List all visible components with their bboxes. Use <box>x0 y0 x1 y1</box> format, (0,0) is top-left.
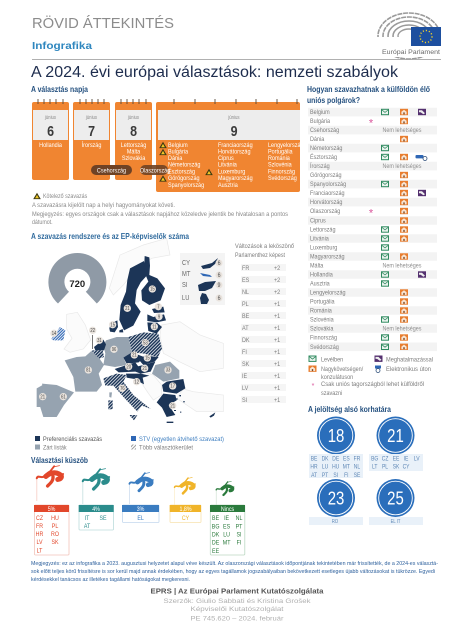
threshold: 3%: 3% <box>137 506 145 513</box>
panel: calendars <box>32 99 304 192</box>
text: election day note: dátumot. <box>32 220 53 226</box>
calendar: 9 June: Ciprus <box>218 156 234 162</box>
calendar: 9 June: Dánia <box>168 156 183 162</box>
legend: voting systems: STV (egyetlen átvihető szavazat) <box>139 436 224 443</box>
France <box>65 351 104 392</box>
threshold: none: IE <box>224 516 229 522</box>
table: seat changes: Változások a leköszönő <box>235 243 294 250</box>
panel: candidate age 18 <box>309 416 363 479</box>
calendar: 9 June: Bulgária <box>168 149 189 156</box>
panel: candidate age 21: 21 <box>387 426 404 446</box>
Corsica <box>109 392 112 398</box>
logo: European Parliament: Európai Parlament <box>382 49 440 56</box>
icon: yellow high jumper <box>175 477 195 505</box>
seat labels: 21 <box>170 403 175 408</box>
calendar: 8 June <box>115 99 152 180</box>
panel: candidate age 21: EE <box>393 456 400 463</box>
threshold: 4%: AT <box>84 524 91 530</box>
inset: small countries: CY <box>182 260 191 267</box>
seat labels: 15 <box>110 322 115 327</box>
Italy <box>103 374 151 412</box>
calendar: 6 June: június <box>44 115 57 121</box>
panel: candidate age 25: 25 <box>387 488 404 509</box>
Czechia <box>123 352 144 364</box>
panel: candidate age 18: AT <box>311 473 318 479</box>
seat labels: 61 <box>61 394 66 399</box>
footer: credits: Szerzők: Giulio Sabbati és Kristina Grošek <box>164 598 311 605</box>
chart: 720 seats hemicycle <box>48 253 106 304</box>
threshold: 4%: IT <box>85 516 90 522</box>
calendar: 9 June: Horvátország <box>218 149 250 156</box>
legend: voting abroad methods: Levélben <box>321 357 343 364</box>
threshold: 5%: HR <box>36 532 43 538</box>
table: voting abroad by country: Belgium <box>310 110 330 116</box>
table: voting abroad by country: Finnország <box>310 335 337 342</box>
panel: candidate age 21 <box>369 416 423 471</box>
table: voting abroad by country: Ausztria <box>310 281 330 288</box>
table: seat changes: Parlamenthez képest <box>235 252 285 259</box>
seat labels: 21 <box>132 352 137 358</box>
table: voting abroad by country: Luxemburg <box>310 245 337 252</box>
Sweden <box>119 261 147 330</box>
table: voting abroad by country: Szlovákia <box>310 326 334 333</box>
pill: Czechia: Csehország <box>97 168 126 175</box>
seat labels: 21 <box>142 366 147 371</box>
Romania <box>152 362 179 382</box>
table: seat changes: +2 <box>274 290 281 296</box>
table: seat changes: +1 <box>274 302 281 308</box>
table: voting abroad by country: Lengyelország <box>310 290 346 297</box>
panel: candidate age 21: BG <box>371 456 378 463</box>
heading: thresholds: Választási küszöb <box>31 456 88 465</box>
footer: credits: EPRS | Az Európai Parlament Kutatószolgálata <box>150 586 324 596</box>
table: voting abroad by country: Nem lehetséges <box>383 128 421 134</box>
threshold: none <box>210 481 245 555</box>
panel: candidate age 21: SK <box>393 464 400 471</box>
legend: voting abroad methods: Nagykövetségen/ <box>321 367 363 373</box>
table: seat changes: +2 <box>274 278 281 284</box>
Cyprus on map <box>209 412 215 418</box>
calendar: 9 June: Portugália <box>268 149 293 156</box>
threshold: none: SI <box>237 532 242 539</box>
seat labels: 11 <box>152 324 157 329</box>
calendar: 7 June <box>73 99 110 180</box>
calendar: 9 June: Svédország <box>268 176 297 182</box>
inset: small countries <box>180 253 225 305</box>
inset: small countries: MT <box>182 271 190 278</box>
table: seat changes: +1 <box>274 362 281 368</box>
calendar: 9 June: június <box>227 115 240 121</box>
threshold: 5%: 5% <box>48 506 56 513</box>
inset: small countries: 9 <box>218 283 220 289</box>
table: voting abroad by country: Málta <box>310 263 324 270</box>
calendar: 9 June: Franciaország <box>218 143 253 149</box>
Finland <box>141 256 165 305</box>
table: voting abroad by country <box>308 108 437 351</box>
Croatia and Slovenia <box>126 374 149 384</box>
text: election day note <box>32 202 288 226</box>
table: voting abroad by country: Olaszország <box>310 209 340 215</box>
heading: voting abroad <box>307 85 430 105</box>
calendar: 9 June: Szlovénia <box>268 162 292 169</box>
threshold: none: ES <box>223 524 230 531</box>
table: voting abroad by country: Nem lehetséges <box>383 263 421 270</box>
heading: voting system and MEPs: A szavazás rendszere és az EP-képviselők száma <box>31 232 189 241</box>
Latvia <box>147 314 166 322</box>
table: voting abroad by country: Ciprus <box>310 218 326 225</box>
Netherlands <box>94 340 106 350</box>
table: voting abroad by country: Szlovénia <box>310 317 334 324</box>
panel: candidate age 21: CY <box>403 464 410 471</box>
icon: red high jumper <box>37 466 63 501</box>
heading: voting abroad: Hogyan szavazhatnak a külföldön élő <box>307 85 430 94</box>
threshold: none: PT <box>236 524 243 531</box>
threshold: 3% <box>122 473 159 522</box>
panel: candidate age 18: FR <box>354 456 360 463</box>
Ireland <box>51 327 65 340</box>
inset: small countries: 6 <box>218 261 221 267</box>
panel: candidate age 21: LV <box>414 456 420 463</box>
seat labels: 14 <box>52 331 57 336</box>
panel: candidate age 18: MT <box>343 464 351 471</box>
table: seat changes: NL <box>242 290 250 296</box>
table: voting abroad by country: Spanyolország <box>310 182 346 188</box>
table: voting abroad by country: Hollandia <box>310 272 333 279</box>
seat labels: 9 <box>158 314 161 319</box>
calendar: 8 June: 8 <box>130 123 137 139</box>
calendar: 9 June: Észtország <box>168 168 195 176</box>
calendar: 7 June: június <box>85 115 98 121</box>
Germany <box>103 337 132 367</box>
seat labels: 21 <box>40 394 45 399</box>
calendar: 9 June: Ausztria <box>218 183 238 189</box>
seat labels: 17 <box>170 383 175 389</box>
table: voting abroad by country: Franciaország <box>310 191 345 197</box>
panel: candidate age 25 <box>369 479 423 525</box>
panel: candidate age 18: BE <box>311 456 318 463</box>
panel: candidate age 18: PT <box>322 473 329 479</box>
calendar: 9 June: Luxemburg <box>218 169 245 176</box>
calendar: 6 June: 6 <box>47 123 54 139</box>
threshold: 4% <box>79 469 114 530</box>
threshold: 5%: RO <box>51 532 59 538</box>
seat labels: 81 <box>86 367 91 373</box>
map: Europe voting systems <box>37 238 223 423</box>
heading: minimum candidate age: A jelöltség alsó korhatára <box>308 405 391 414</box>
pill: Czechia <box>91 165 132 175</box>
callout line for Belgium <box>91 335 94 349</box>
panel: candidate age 23: RO <box>332 519 339 524</box>
threshold: 4%: 4% <box>92 506 101 513</box>
calendar: 9 June: Finnország <box>268 169 295 176</box>
table: seat changes: +1 <box>274 338 281 344</box>
seat labels: 7 <box>157 304 160 309</box>
seat labels: 76 <box>120 386 125 391</box>
panel: candidate age 18: LU <box>322 464 328 471</box>
pill: Italy <box>140 165 170 175</box>
panel: candidate age 18: DK <box>322 456 329 463</box>
heading: election day: A választás napja <box>31 85 88 94</box>
legend: voting abroad methods: * <box>312 383 315 390</box>
note: kérdésekkel tanácsos az illetékes tagállami hatóságokat megkeresni. <box>31 577 190 583</box>
seat labels: 31 <box>97 338 102 343</box>
table: seat changes: +1 <box>274 386 281 392</box>
seat labels: 15 <box>145 355 150 361</box>
Greek islands <box>167 395 185 423</box>
seat labels: 20 <box>126 364 131 369</box>
panel: candidate age 18: HU <box>332 464 339 471</box>
panel: candidate age 25: EL IT <box>391 519 401 524</box>
chart: 720 seats hemicycle: 720 <box>69 279 85 290</box>
threshold: none: NL <box>236 516 243 522</box>
Greece <box>157 394 177 417</box>
legend: voting systems <box>35 436 224 452</box>
calendar: 7 June: 7 <box>88 123 95 139</box>
table: voting abroad by country: Portugália <box>310 299 335 306</box>
table: seat changes: LV <box>242 386 248 392</box>
table: seat changes: PL <box>242 302 249 308</box>
calendar: 9 June: Magyarország <box>218 176 253 182</box>
calendar: 6 June: Hollandia <box>39 143 63 149</box>
pill: Italy: Olaszország <box>140 168 170 175</box>
calendar: 8 June: Málta <box>127 149 141 156</box>
table: voting abroad by country: Románia <box>310 308 332 315</box>
table: voting abroad by country: Bulgária <box>310 119 331 125</box>
calendar: 9 June: Görögország <box>168 176 200 182</box>
table: seat changes: SK <box>242 362 249 368</box>
footer: credits: PE 745.620 – 2024. február <box>190 616 284 622</box>
seat labels: 12 <box>134 379 139 384</box>
threshold: none: LU <box>223 532 230 539</box>
legend: compulsory voting: Kötelező szavazás <box>43 194 87 200</box>
table: seat changes: IE <box>242 374 247 380</box>
table: seat changes: AT <box>242 326 249 332</box>
table: seat changes: +1 <box>274 398 281 404</box>
icon: blue high jumper <box>129 473 153 504</box>
legend: voting abroad methods: konzulátuson <box>321 375 353 381</box>
legend: voting abroad methods: szavazni <box>321 391 342 397</box>
calendar: 9 June: Lengyelország <box>268 143 304 149</box>
calendar: 9 June <box>156 99 304 192</box>
panel: candidate age 21: PL <box>382 464 388 471</box>
Belgium <box>91 350 104 359</box>
threshold: 5%: SK <box>51 540 59 546</box>
title: A 2024. évi európai választások: nemzeti szabályok <box>31 64 398 81</box>
calendar: 9 June: 9 <box>231 123 238 139</box>
legend: voting abroad methods: Csak uniós tagországból lehet külföldről <box>321 381 424 388</box>
threshold: none: FI <box>237 540 242 547</box>
table: seat changes: +2 <box>274 266 281 272</box>
Estonia <box>152 307 165 313</box>
legend: voting abroad methods <box>308 356 433 397</box>
Portugal <box>37 385 44 407</box>
threshold: 1.8%: 1,8% <box>180 506 192 513</box>
threshold: 5%: PL <box>52 524 59 530</box>
Sardinia <box>108 400 113 410</box>
table: seat changes: BE <box>242 314 249 320</box>
panel: candidate age 18: SE <box>354 473 361 479</box>
threshold: none: DK <box>212 532 219 539</box>
subheader: infographic: Infografika <box>32 40 92 52</box>
threshold: none: DE <box>212 540 219 547</box>
calendar: 9 June: Litvánia <box>218 162 237 169</box>
table: seat changes <box>235 243 294 404</box>
panel: candidate age 21: LT <box>372 464 378 471</box>
panel: candidate age 21: CZ <box>382 456 389 463</box>
inset: small countries: 6 <box>218 273 221 279</box>
inset: small countries: SI <box>182 282 188 289</box>
Sicily <box>129 415 137 420</box>
threshold: none: MT <box>223 540 231 547</box>
panel: candidate age 18: DE <box>332 456 339 463</box>
panel: candidate age 18: ES <box>343 456 350 463</box>
table: seat changes: +1 <box>274 326 281 332</box>
table: voting abroad by country: Írország <box>310 163 330 170</box>
footer: credits <box>150 586 324 622</box>
threshold: 5%: LV <box>36 540 43 546</box>
table: seat changes: ES <box>242 278 249 284</box>
legend: voting systems: Több választókerület <box>139 444 193 452</box>
seat labels: 21 <box>125 306 130 311</box>
footer: credits: Képviselői Kutatószolgálat <box>190 606 284 613</box>
seat labels: 53 <box>143 340 148 345</box>
legend: voting abroad methods: Meghatalmazással <box>386 356 433 364</box>
Lithuania <box>147 322 162 334</box>
calendar: 8 June: június <box>127 115 140 121</box>
icon: teal high jumper <box>83 469 109 504</box>
note: sok előtt teljes körű frissítésre is sor kerül majd annak érdekében, hogy az egyes tagállamok jogszabályaiban bekövetkezett esetleges újabb változásokat is tükrözze. Egyedi <box>31 569 435 575</box>
Hungary <box>135 362 155 374</box>
legend: voting systems: Zárt listák <box>43 445 68 452</box>
threshold: none: BG <box>212 524 220 531</box>
table: seat changes: +1 <box>274 374 281 380</box>
threshold: 3%: EL <box>137 516 144 522</box>
table: voting abroad by country: Magyarország <box>310 254 345 261</box>
table: voting abroad by country: Litvánia <box>310 236 329 243</box>
Poland <box>128 332 162 357</box>
threshold: 5%: LT <box>37 548 43 555</box>
threshold: none: Nincs <box>221 506 234 513</box>
logo: European Parliament <box>376 13 444 59</box>
note: Megjegyzés: ez az infografika a 2023. augusztusi helyzetet alapul véve készült. Az olaszországi választások időpontjának tekintetében már frissítették, de a 2024-es választá- <box>31 561 438 567</box>
Spain <box>40 384 74 417</box>
table: voting abroad by country: Nem lehetséges <box>383 326 421 333</box>
threshold: 5%: CZ <box>36 516 43 522</box>
table: seat changes: DK <box>242 338 250 344</box>
table: voting abroad by country: Dánia <box>310 137 325 143</box>
panel: candidate age 23 <box>309 479 363 525</box>
table: voting abroad by country: Lettország <box>310 227 336 234</box>
threshold: 1.8% <box>170 477 201 522</box>
table: voting abroad by country: Németország <box>310 146 342 152</box>
Denmark <box>109 320 123 332</box>
threshold: none: EE <box>212 549 219 555</box>
threshold: 4%: SE <box>99 516 107 522</box>
calendar: 8 June: Szlovákia <box>122 156 146 162</box>
inset: small countries: LU <box>182 295 190 302</box>
calendar: 9 June: Románia <box>268 156 290 162</box>
calendar: 8 June: Lettország <box>121 143 146 149</box>
seat labels: 33 <box>166 367 171 373</box>
seat labels: 22 <box>90 328 95 333</box>
heading: voting abroad: uniós polgárok? <box>307 96 360 105</box>
table: voting abroad by country: * <box>369 118 374 130</box>
panel: candidate age 18: SI <box>333 473 339 479</box>
table: voting abroad by country: Észtország <box>310 154 337 161</box>
table: seat changes: +1 <box>274 350 281 356</box>
text: election day note: Megjegyzés: egyes országok csak a választások napjához közeledve jelentik be hivatalosan a pontos <box>32 211 288 218</box>
Austria <box>115 362 139 372</box>
table: voting abroad by country: Horvátország <box>310 200 342 206</box>
header rule <box>32 58 441 61</box>
legend: voting systems: Preferenciális szavazás <box>43 436 103 443</box>
calendar: 9 June: Németország <box>168 162 200 169</box>
Bulgaria <box>162 379 185 394</box>
panel: candidate age 21: IE <box>404 456 409 463</box>
threshold: 5% <box>34 466 69 555</box>
table: seat changes: +1 <box>274 314 281 320</box>
threshold: 5%: FR <box>36 524 43 530</box>
inset: small countries: 6 <box>218 296 221 302</box>
table: voting abroad by country: Nem lehetséges <box>383 164 421 170</box>
seat labels: 15 <box>150 286 155 292</box>
panel: candidate age 23: 23 <box>328 488 344 509</box>
Slovakia <box>139 356 159 365</box>
table: seat changes: SI <box>242 398 247 404</box>
table: seat changes: FR <box>242 266 250 272</box>
legend: voting abroad methods: Elektronikus úton <box>386 366 431 373</box>
seat labels <box>39 285 176 409</box>
seat labels: 96 <box>112 347 117 352</box>
panel: candidate age 18: FI <box>344 473 349 479</box>
panel: candidate age 18: NL <box>354 464 360 471</box>
table: voting abroad by country: Csehország <box>310 128 339 134</box>
note <box>31 561 438 583</box>
threshold: 5%: HU <box>51 516 59 522</box>
text: election day note: A szavazásra kijelölt nap a helyi hagyományokat követi. <box>32 202 175 209</box>
calendar: 9 June: Belgium <box>168 143 188 149</box>
table: voting abroad by country: * <box>369 208 374 220</box>
panel: candidate age 18: HR <box>310 464 318 471</box>
table: voting abroad by country: Görögország <box>310 173 342 179</box>
table: voting abroad by country: Svédország <box>310 345 339 351</box>
header label: RÖVID ÁTTEKINTÉS <box>32 14 174 32</box>
calendar: 6 June <box>32 99 69 180</box>
threshold: 1.8%: CY <box>182 516 189 522</box>
non-EU surroundings <box>64 238 223 412</box>
table: seat changes: FI <box>242 350 247 356</box>
calendar: 7 June: Írország <box>82 142 101 149</box>
panel: candidate age 18: 18 <box>328 426 344 446</box>
calendar: 9 June: Spanyolország <box>168 183 204 189</box>
icon: green high jumper <box>216 481 234 505</box>
threshold: none: BE <box>212 516 219 522</box>
